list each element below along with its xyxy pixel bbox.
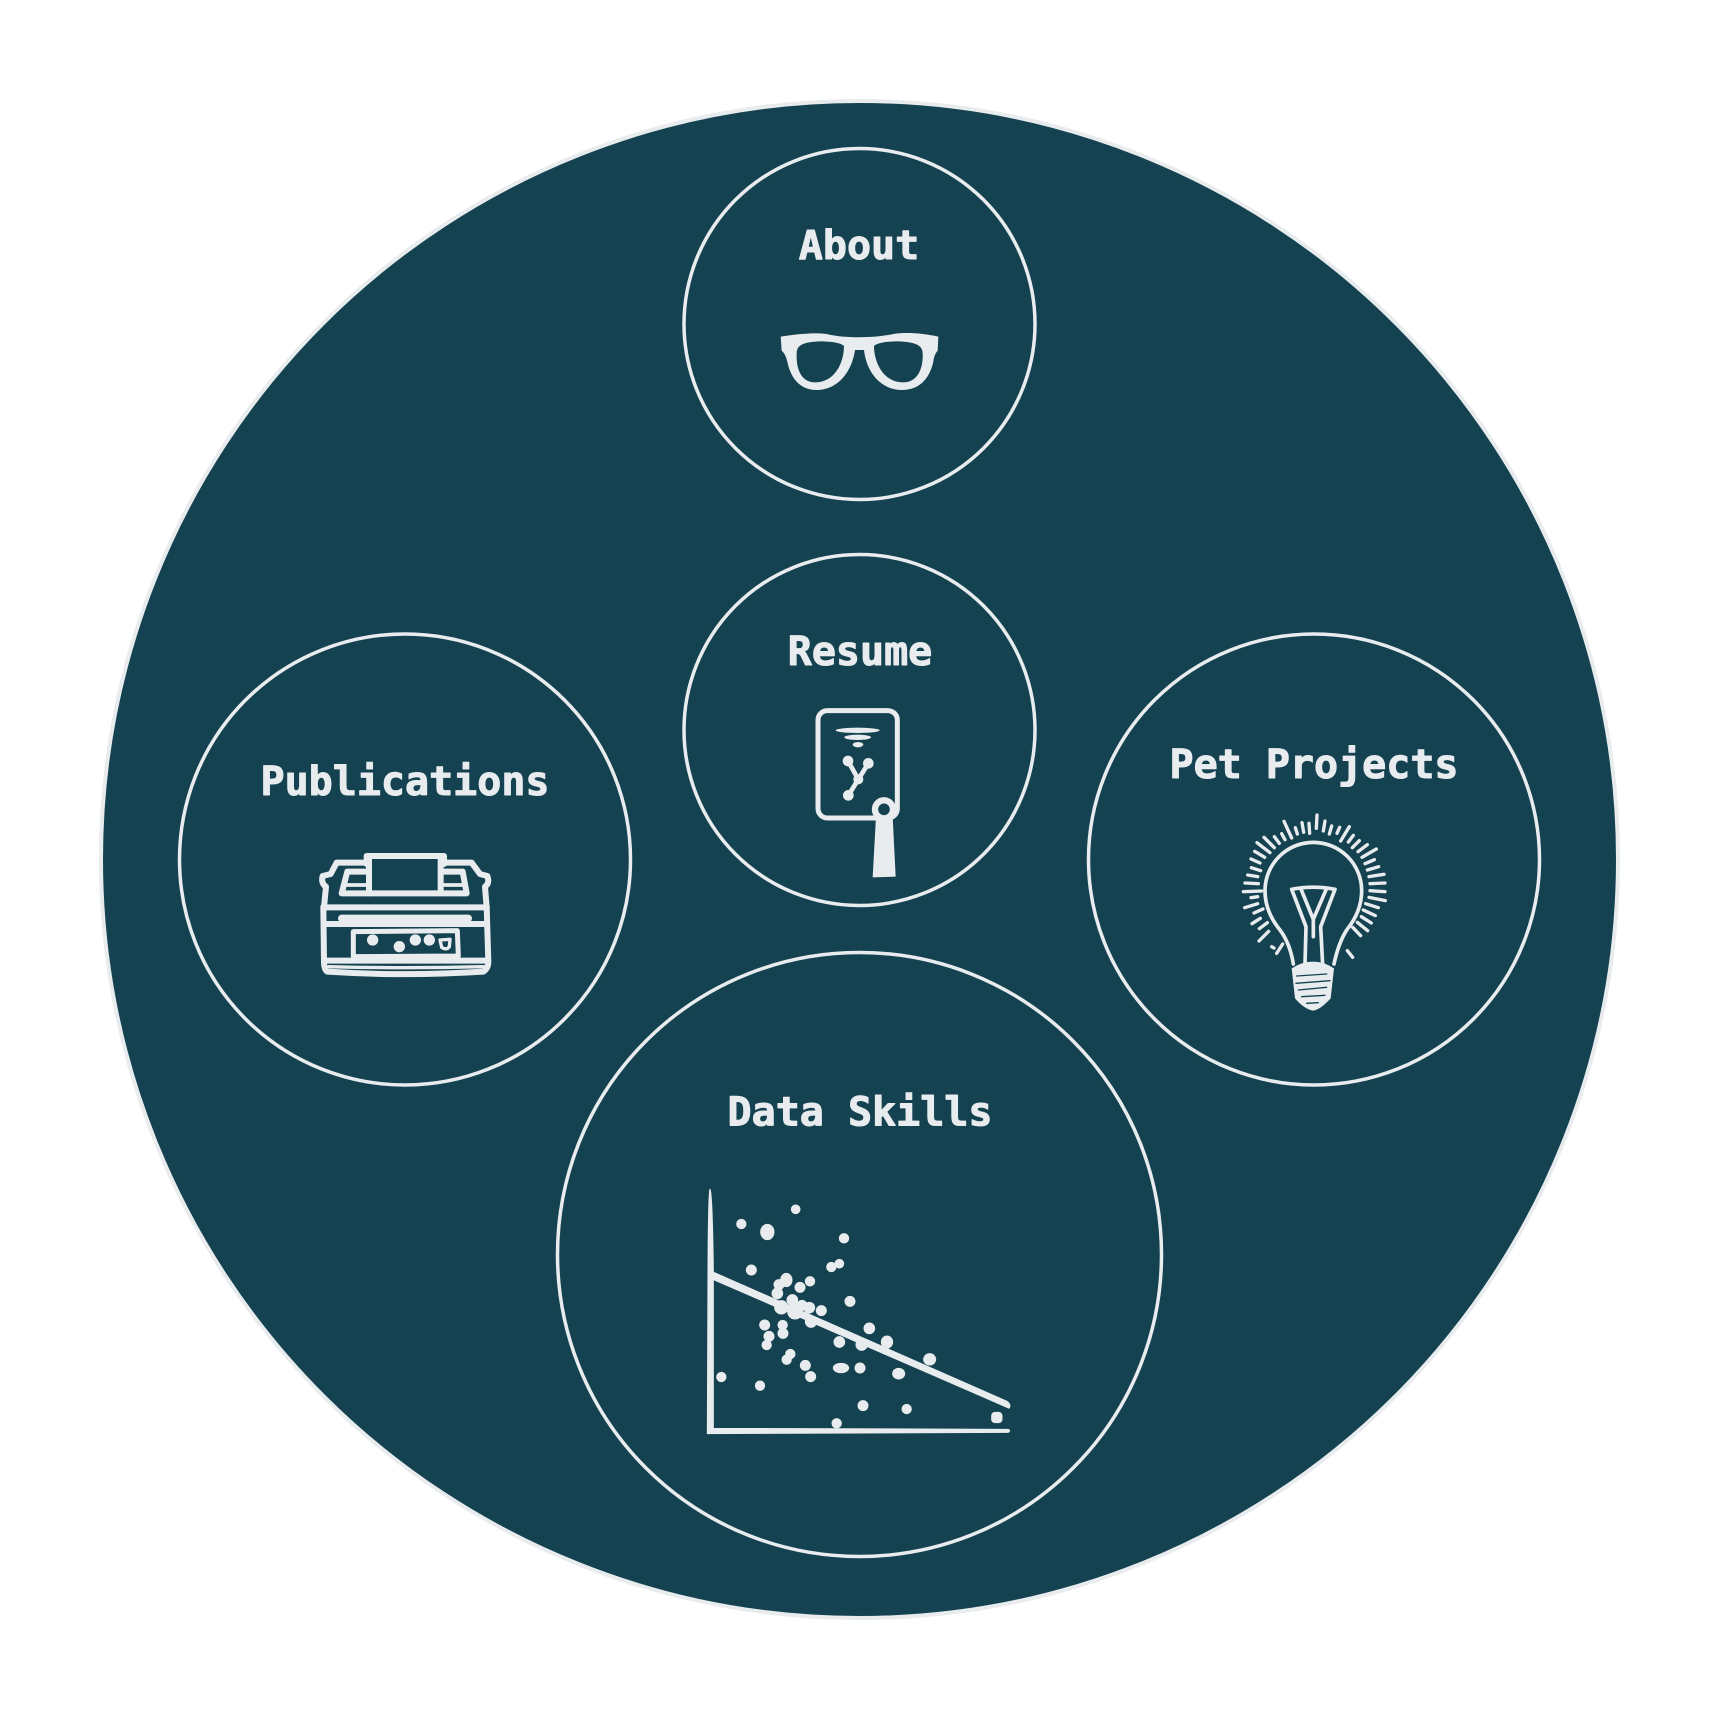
publications ring bbox=[180, 634, 630, 1085]
panel: resume bbox=[684, 554, 1035, 906]
about ring bbox=[684, 148, 1035, 500]
icon: light bulb bbox=[1243, 815, 1385, 1011]
heading: resume: Resume bbox=[788, 629, 932, 675]
trend line bbox=[713, 1272, 1010, 1408]
resume ring bbox=[684, 554, 1035, 906]
panel: about bbox=[684, 148, 1035, 500]
heading: data skills: Data Skills bbox=[728, 1090, 992, 1136]
panel: data skills bbox=[558, 952, 1162, 1556]
icon: resume tablet with pointer bbox=[818, 711, 897, 877]
pet projects ring bbox=[1088, 634, 1540, 1085]
chart: scatter plot with trend line bbox=[707, 1189, 1010, 1434]
icon: glasses bbox=[781, 333, 938, 390]
chart axes bbox=[707, 1189, 1010, 1434]
panel: pet projects bbox=[1088, 634, 1540, 1085]
data skills ring bbox=[558, 952, 1162, 1556]
heading: pet projects: Pet Projects bbox=[1170, 742, 1458, 788]
heading: publications: Publications bbox=[261, 759, 549, 805]
main circle background bbox=[101, 101, 1618, 1618]
scatter points bbox=[717, 1205, 1002, 1428]
heading: about: About bbox=[799, 223, 919, 269]
panel: publications bbox=[180, 634, 630, 1085]
icon: printer bbox=[322, 856, 488, 974]
